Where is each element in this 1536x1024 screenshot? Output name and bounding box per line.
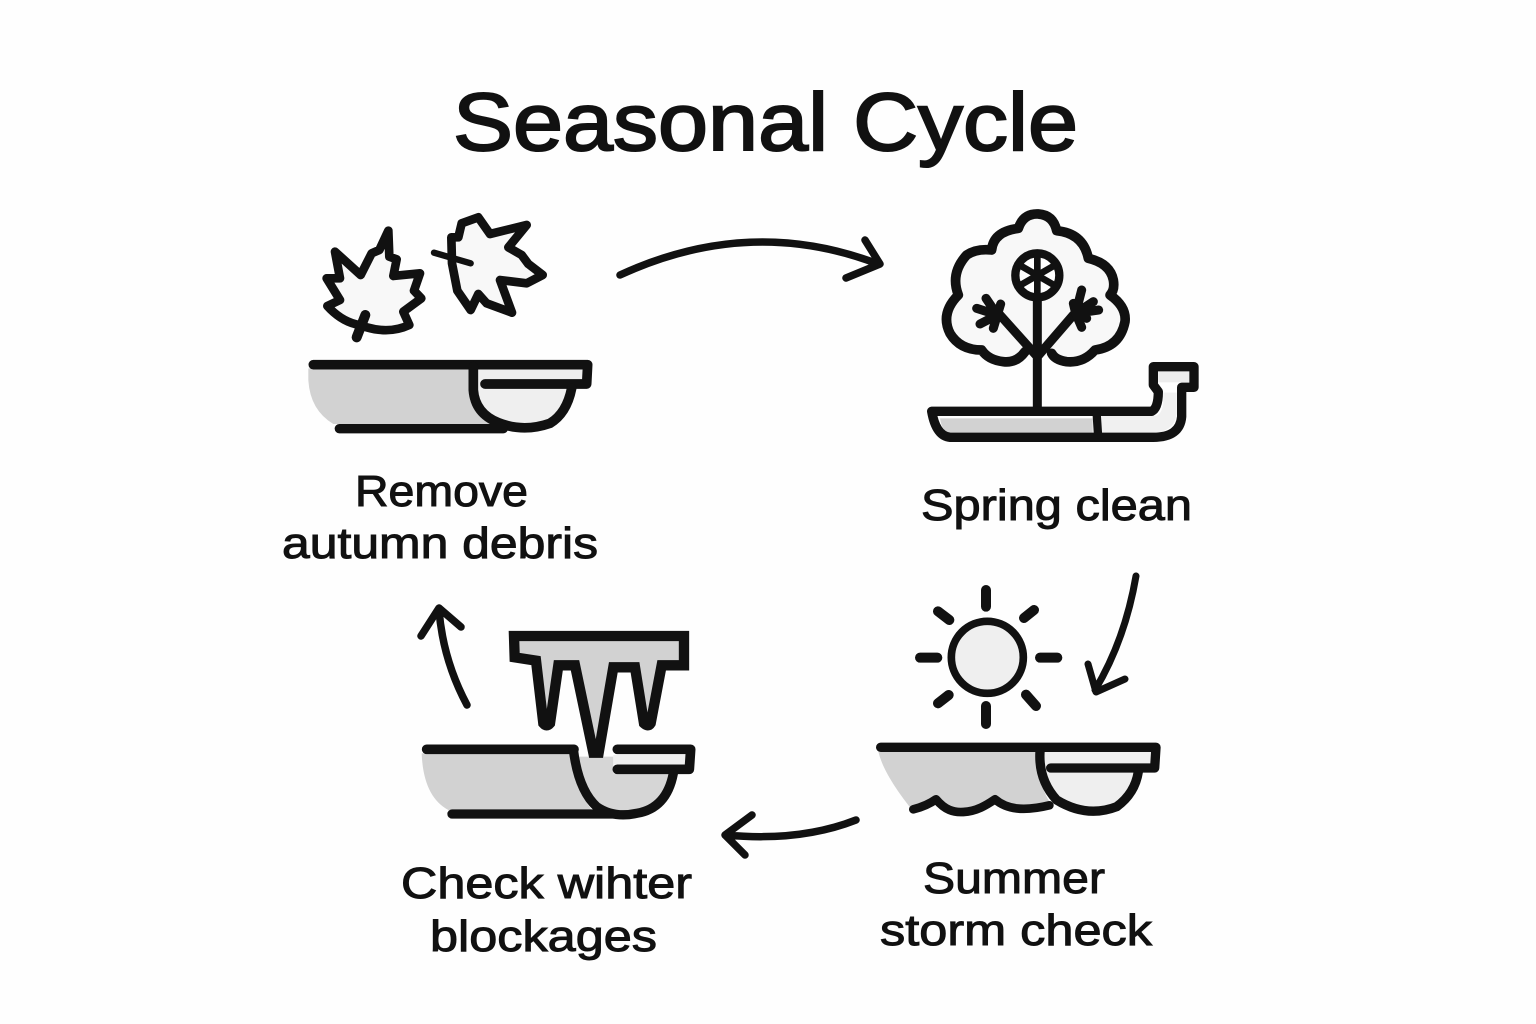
- step: spring clean: [921, 214, 1194, 530]
- label: spring clean: Spring clean: [921, 481, 1192, 530]
- label: remove autumn debris: [282, 467, 598, 568]
- step: summer storm check: [878, 590, 1156, 955]
- icon: tree on gutter: [932, 214, 1194, 437]
- icon: icicles over gutter: [422, 636, 691, 815]
- label: summer storm check: [880, 854, 1153, 955]
- icon: icicles: [514, 636, 684, 753]
- icon: gutter with downpipe: [932, 367, 1194, 437]
- label: check winter blockages: [401, 859, 692, 961]
- arrow: autumn to spring: [620, 240, 880, 278]
- icon: tree canopy: [946, 214, 1125, 362]
- step: check winter blockages: [401, 636, 692, 961]
- arrow: winter to autumn: [421, 608, 467, 705]
- label: summer storm check: storm check: [880, 906, 1153, 955]
- arrow: summer to winter: [725, 815, 856, 855]
- icon: sun and gutter: [878, 590, 1156, 813]
- label: remove autumn debris: autumn debris: [282, 519, 598, 568]
- icon: flower: [1015, 253, 1059, 297]
- icon: right maple leaf: [434, 217, 543, 313]
- icon: gutter with storm water: [878, 747, 1156, 813]
- label: check winter blockages: blockages: [430, 912, 657, 961]
- title: Seasonal Cycle: [453, 77, 1078, 168]
- icon: gutter: [308, 365, 588, 429]
- step: remove autumn debris: [282, 217, 598, 568]
- label: summer storm check: Summer: [923, 854, 1105, 903]
- icon: sun: [920, 590, 1057, 724]
- icon: autumn leaves above gutter: [308, 217, 588, 429]
- label: remove autumn debris: Remove: [355, 467, 528, 516]
- label: check winter blockages: Check wihter: [401, 859, 692, 908]
- arrow: spring to summer: [1088, 576, 1136, 692]
- icon: trunk and branches: [977, 283, 1099, 407]
- icon: gutter: [422, 749, 691, 815]
- icon: left maple leaf: [327, 231, 421, 337]
